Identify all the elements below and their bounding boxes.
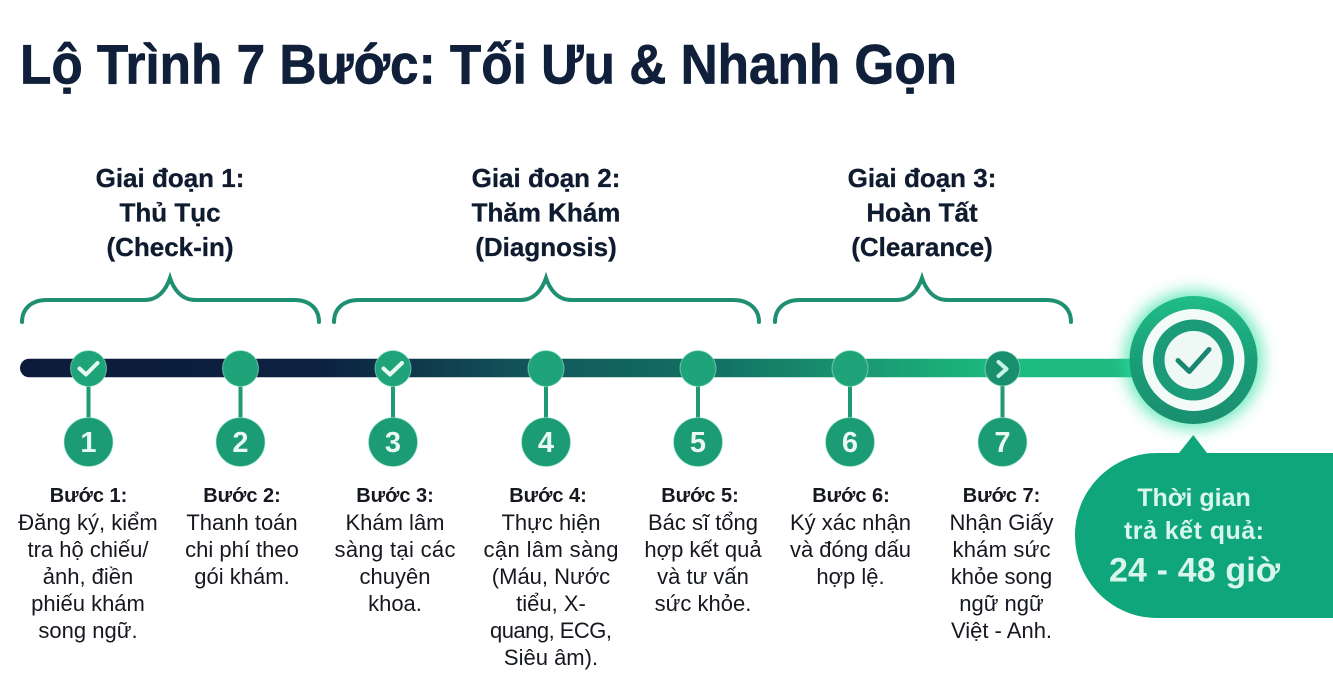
step 5 marker: 5 <box>690 427 706 459</box>
step 1 text: tra hộ chiếu/ <box>27 537 149 562</box>
step 1 marker: 1 <box>80 427 97 459</box>
brace: phase 3 <box>775 278 1071 322</box>
step 4 text: Bước 4: <box>509 485 587 507</box>
step 1 text <box>18 485 158 643</box>
phase 2 heading: (Diagnosis) <box>475 232 617 262</box>
step 7 text: ngữ ngữ <box>959 591 1044 616</box>
step 4 text: cận lâm sàng <box>484 537 618 562</box>
step 1 text: song ngữ. <box>38 618 138 643</box>
step 5 text: sức khỏe. <box>655 591 751 616</box>
step 2 marker <box>216 350 265 466</box>
phase 2 heading: Giai đoạn 2: <box>472 163 620 193</box>
phase 3 heading: (Clearance) <box>851 232 993 262</box>
callout: result time: trả kết quả: <box>1124 517 1264 545</box>
step 1 text: Đăng ký, kiểm <box>18 510 158 535</box>
step 5 text: Bước 5: <box>661 485 739 507</box>
finish badge with check <box>1124 291 1262 429</box>
step 4 text: tiểu, X- <box>516 591 586 616</box>
step 3 marker: 3 <box>385 427 401 459</box>
phase 2 heading: Thăm Khám <box>472 198 620 228</box>
step 4 text: (Máu, Nước <box>492 564 610 589</box>
phase 3 heading: Hoàn Tất <box>866 198 978 228</box>
step 2 text: Thanh toán <box>186 510 298 535</box>
callout: result time: 24 - 48 giờ <box>1109 552 1281 590</box>
step 7 text: Bước 7: <box>963 485 1040 507</box>
step 5 text <box>644 485 762 616</box>
step 4 text <box>484 485 618 670</box>
phase 2 heading <box>472 163 620 262</box>
step 4 text: quang, ECG, <box>490 618 612 643</box>
step 1 text: phiếu khám <box>31 591 145 616</box>
step 5 text: hợp kết quả <box>644 537 762 562</box>
phase 1 heading: Giai đoạn 1: <box>96 163 244 193</box>
step 7 text: khỏe song <box>951 564 1052 589</box>
step 5 text: và tư vấn <box>657 564 749 589</box>
callout: result time <box>1075 435 1333 618</box>
step 1 marker <box>64 350 113 466</box>
timeline bar <box>20 359 1150 377</box>
step 6 text <box>790 485 911 589</box>
step 2 text <box>185 485 299 589</box>
step 3 text: Bước 3: <box>356 485 434 507</box>
step 7 text: khám sức <box>952 537 1050 562</box>
brace: phase 2 <box>334 278 759 322</box>
step 3 text: khoa. <box>368 591 422 616</box>
step 2 text: chi phí theo <box>185 537 299 562</box>
step 4 marker <box>522 350 570 466</box>
step 6 text: Ký xác nhận <box>790 510 911 535</box>
step 7 text: Nhận Giấy <box>950 510 1053 535</box>
step 4 text: Thực hiện <box>501 510 601 535</box>
step 2 text: Bước 2: <box>203 485 281 507</box>
step 2 text: gói khám. <box>194 564 290 589</box>
step 4 marker: 4 <box>538 427 554 459</box>
step 3 text: Khám lâm <box>345 510 445 535</box>
step 4 text: Siêu âm). <box>504 645 598 670</box>
title: Lộ Trình 7 Bước: Tối Ưu & Nhanh Gọn <box>20 32 957 96</box>
step 2 marker: 2 <box>232 427 249 459</box>
step 6 text: hợp lệ. <box>816 564 885 589</box>
step 3 text: sàng tại các <box>334 537 456 562</box>
callout: result time: Thời gian <box>1137 484 1251 512</box>
step 7 marker: 7 <box>994 427 1011 459</box>
phase 1 heading: (Check-in) <box>106 232 234 262</box>
step 3 text <box>334 485 456 616</box>
step 7 text <box>950 485 1053 643</box>
step 6 text: Bước 6: <box>812 485 890 507</box>
step 5 marker <box>674 350 722 466</box>
step 1 text: ảnh, điền <box>43 564 133 589</box>
phase 3 heading <box>848 163 996 262</box>
step 3 text: chuyên <box>360 564 430 589</box>
step 7 marker <box>978 351 1027 466</box>
step 6 marker <box>826 350 874 466</box>
brace: phase 1 <box>22 278 319 322</box>
step 5 text: Bác sĩ tổng <box>648 510 758 535</box>
step 6 marker: 6 <box>842 427 858 459</box>
step 3 marker <box>368 350 418 466</box>
phase 1 heading: Thủ Tục <box>119 198 221 228</box>
step 1 text: Bước 1: <box>50 485 127 507</box>
phase 3 heading: Giai đoạn 3: <box>848 163 996 193</box>
phase 1 heading <box>96 163 244 262</box>
step 6 text: và đóng dấu <box>790 537 911 562</box>
step 7 text: Việt - Anh. <box>951 618 1052 643</box>
